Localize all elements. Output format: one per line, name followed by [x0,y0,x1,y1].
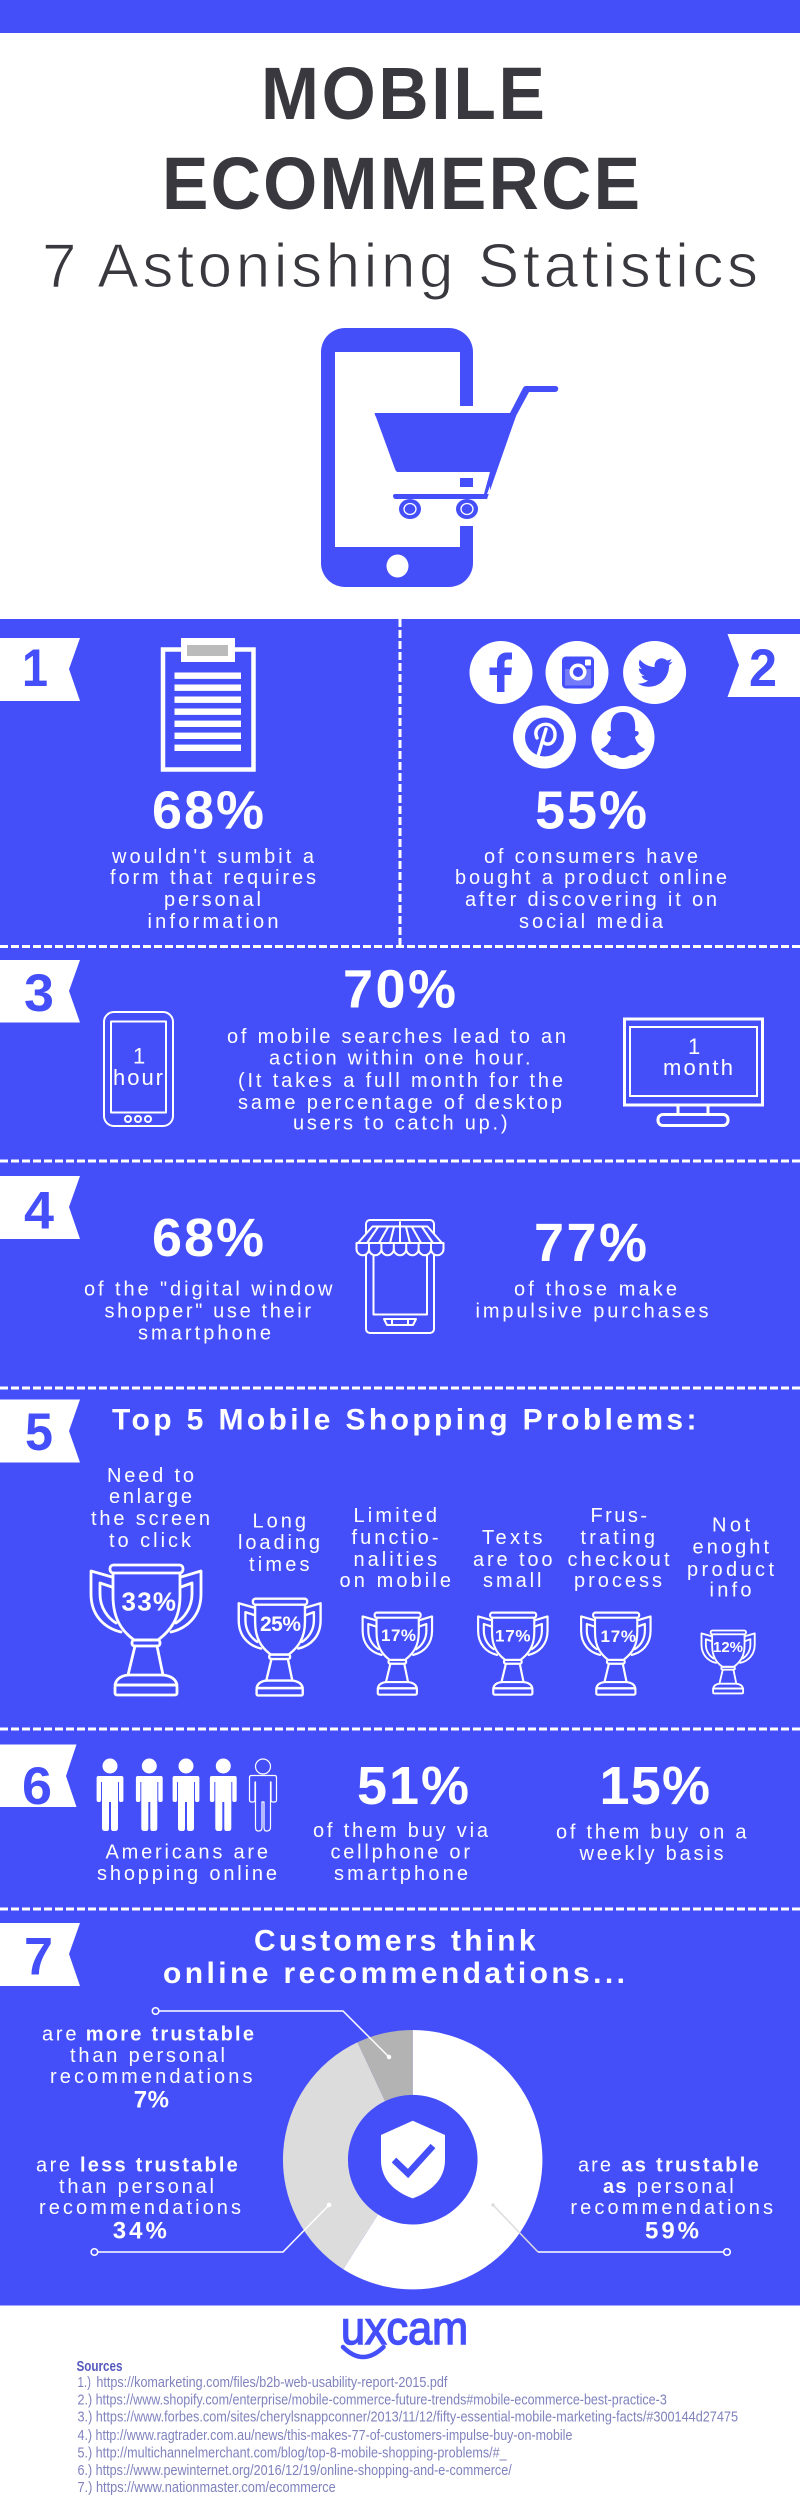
problem 3: limited functionalities, 17%: Limited [354,1505,437,1527]
problem 4: texts too small, 17%: 17% [495,1626,530,1646]
stat: 68%: 68% [152,780,264,840]
number ribbon 6 [0,1744,76,1816]
stat: 55%: 55% [535,780,647,840]
description: of those make [514,1278,677,1300]
description: of consumers have [484,846,698,868]
problem 6: not enough product info, 12%: info [710,1580,752,1602]
problem 1: enlarge the screen, 33%: Need to [107,1465,194,1487]
number ribbon 5 [0,1400,80,1462]
panel: statistic 5 [0,1400,774,1695]
label: more trustable 7%: recommendations [50,2066,252,2088]
description: (It takes a full month for the [238,1070,563,1092]
number ribbon 7: 7 [24,1928,53,1986]
description [110,846,316,933]
label: as trustable 59%: 59% [645,2218,699,2244]
panel: statistic 4 [0,1176,708,1344]
problem 5: frustrating checkout, 17%: process [574,1570,662,1592]
number ribbon 6: 6 [22,1757,52,1816]
slice: as trustable 59% [343,2030,542,2289]
description: weekly basis [578,1843,724,1865]
number ribbon 4 [0,1176,80,1240]
source 6: 6.) https://www.pewinternet.org/2016/12/19/online-shopping-and-e-commerce/ [78,2462,512,2479]
description: wouldn't sumbit a [111,846,315,868]
problem 5: frustrating checkout, 17%: checkout [568,1549,670,1571]
callout line: as trustable [491,2203,730,2255]
stat: 68%: 68% [152,1208,264,1268]
problem 6: not enough product info, 12% [687,1514,774,1693]
label: as trustable 59%: recommendations [570,2197,773,2219]
panel: statistic 6 [0,1744,747,1885]
title line: ecommerce: ECOMMERCE [162,143,640,225]
icon: twitter [623,641,686,704]
label: more trustable 7%: are [42,2024,76,2046]
title [42,53,758,301]
description: bought a product online [455,867,727,889]
source 7: 7.) https://www.nationmaster.com/ecommerce [78,2479,336,2496]
label: less trustable 34%: are [36,2154,70,2176]
problem 1: enlarge the screen, 33% [91,1465,210,1695]
icon: snapchat [592,706,654,769]
icon: phone with 1 hour [104,1012,173,1126]
source 4: 4.) http://www.ragtrader.com.au/news/this-makes-77-of-customers-impulse-buy-on-mobile [78,2427,572,2444]
problem 3: limited functionalities, 17%: on mobile [340,1570,451,1592]
problem 6: not enough product info, 12%: Not [712,1514,750,1536]
label: as trustable 59%: are [578,2154,611,2176]
problem 2: long loading times, 25%: 25% [260,1613,301,1636]
problem 1: enlarge the screen, 33%: 33% [122,1586,176,1616]
logo: uxcam: uxcam [341,2302,468,2354]
title line: mobile: MOBILE [261,53,545,135]
icon: phone with 1 hour: hour [113,1065,163,1090]
panel: statistic 1 [0,638,316,933]
heading [163,1924,625,1990]
icon: pinterest [513,706,576,768]
number ribbon 4: 4 [24,1182,55,1240]
problem 5: frustrating checkout, 17% [568,1505,670,1695]
label: as trustable 59%: as trustable [621,2154,759,2176]
icon: clipboard [163,638,254,770]
problem 1: enlarge the screen, 33%: enlarge [109,1486,192,1508]
top bar [0,0,800,33]
label: as trustable 59%: as [603,2176,626,2198]
number ribbon 7 [0,1923,80,1986]
label: more trustable 7%: 7% [134,2086,169,2114]
heading: Top 5 Mobile Shopping Problems: [112,1404,696,1436]
number ribbon 2: 2 [749,639,777,698]
problem 3: limited functionalities, 17%: functio- [352,1527,438,1549]
problem 4: texts too small, 17%: are too [473,1549,552,1571]
label: more trustable 7% [42,2024,254,2114]
description: information [148,911,278,933]
problem 4: texts too small, 17% [473,1527,552,1695]
subtitle: 7 Astonishing Statistics [42,232,758,301]
source 2: 2.) https://www.shopify.com/enterprise/mobile-commerce-future-trends#mobile-ecommerce-best-practice-3 [78,2391,667,2408]
source 1: 1.) [78,2374,91,2391]
problem 3: limited functionalities, 17%: 17% [381,1626,416,1645]
description: cellphone or [330,1842,470,1864]
label: less trustable 34%: 34% [113,2218,167,2244]
icon: phone with 1 hour: 1 [133,1044,145,1068]
description: social media [519,911,664,933]
problem 2: long loading times, 25% [238,1510,321,1695]
label: more trustable 7%: more trustable [86,2024,254,2046]
description: Americans: shopping online [97,1863,277,1885]
blue body background [0,619,800,2306]
callout line: less trustable [91,2204,330,2255]
number ribbon 1 [0,638,80,701]
label: as trustable 59% [570,2154,773,2244]
description: of them buy via [313,1820,489,1842]
label: less trustable 34% [36,2154,241,2244]
heading: online recommendations... [163,1957,625,1990]
icon: shield with check [381,2121,445,2198]
description [227,1026,566,1134]
description [476,1278,708,1322]
problem 5: frustrating checkout, 17%: Frus- [590,1505,647,1527]
description: smartphone [334,1863,468,1885]
label: more trustable 7%: than personal [70,2045,225,2067]
description: form that requires [110,867,316,889]
stat: 15%: 15% [600,1756,710,1816]
icon: instagram [546,641,608,704]
icon: row of people [97,1758,276,1831]
number ribbon 3: 3 [24,964,54,1023]
problem 2: long loading times, 25%: Long [252,1510,306,1532]
number ribbon 1: 1 [22,639,48,698]
problem 6: not enough product info, 12%: enoght [692,1536,769,1558]
description: of them buy on a [556,1822,747,1844]
label: less trustable 34%: less trustable [80,2154,238,2176]
description [84,1278,333,1344]
description: after discovering it on [465,889,717,911]
sources list [76,2358,738,2496]
number ribbon 3 [0,960,80,1023]
callout line: more trustable [152,2008,390,2058]
problem 4: texts too small, 17%: Texts [482,1527,542,1549]
slice: more trustable 7% [358,2030,413,2101]
sources heading: Sources [76,2358,122,2375]
source 1: https://komarketing.com/files/b2b-web-usability-report-2015.pdf [96,2374,448,2391]
slice: less trustable 34% [283,2042,385,2269]
icon: phone with shopping cart [321,328,558,587]
panel: statistic 3 [0,960,762,1134]
description [313,1820,489,1885]
description: shopper" use their [104,1300,311,1322]
number ribbon 5: 5 [25,1403,53,1462]
icon: monitor with 1 month: 1 [688,1034,700,1059]
label: less trustable 34%: recommendations [39,2197,241,2219]
icon: facebook [470,641,532,704]
description: of mobile searches lead to an [227,1026,566,1048]
number ribbon 2 [728,634,800,698]
stat: 70%: 70% [343,960,456,1020]
source 5: 5.) http://multichannelmerchant.com/blog/top-8-mobile-shopping-problems/#_ [78,2445,507,2462]
donut chart [283,2030,542,2289]
description: smartphone [138,1322,271,1344]
panel: statistic 7 [0,1923,773,2289]
description: Americans [97,1842,277,1885]
stat: 77%: 77% [534,1213,647,1273]
problem 3: limited functionalities, 17%: nalities [354,1549,437,1571]
description [556,1822,747,1865]
stat: 51%: 51% [357,1756,469,1816]
label: as trustable 59%: personal [637,2176,734,2198]
problem 2: long loading times, 25%: times [249,1554,310,1576]
description: impulsive purchases [476,1300,708,1322]
problem 3: limited functionalities, 17% [340,1505,451,1695]
icon: monitor with 1 month [624,1019,762,1126]
description: of the "digital window [84,1278,333,1300]
problem 1: enlarge the screen, 33%: to click [109,1530,192,1552]
description [455,846,727,933]
icon: phone storefront [356,1220,444,1333]
problem 1: enlarge the screen, 33%: the screen [91,1508,210,1530]
problem 2: long loading times, 25%: loading [238,1532,320,1554]
description: Americans: Americans are [106,1842,268,1864]
panel: statistic 2 [455,634,800,933]
description: same percentage of desktop [238,1092,562,1114]
problem 4: texts too small, 17%: small [483,1570,542,1592]
description: action within one hour. [269,1048,530,1070]
problem 5: frustrating checkout, 17%: 17% [600,1627,636,1646]
label: less trustable 34%: than personal [59,2176,214,2198]
heading: Customers think [254,1924,536,1958]
problem 6: not enough product info, 12%: 12% [713,1639,743,1656]
icon: monitor with 1 month: month [663,1055,733,1080]
description: personal [164,889,261,911]
description: users to catch up.) [293,1112,508,1134]
problem 6: not enough product info, 12%: product [687,1559,774,1581]
problem 5: frustrating checkout, 17%: trating [580,1527,655,1549]
